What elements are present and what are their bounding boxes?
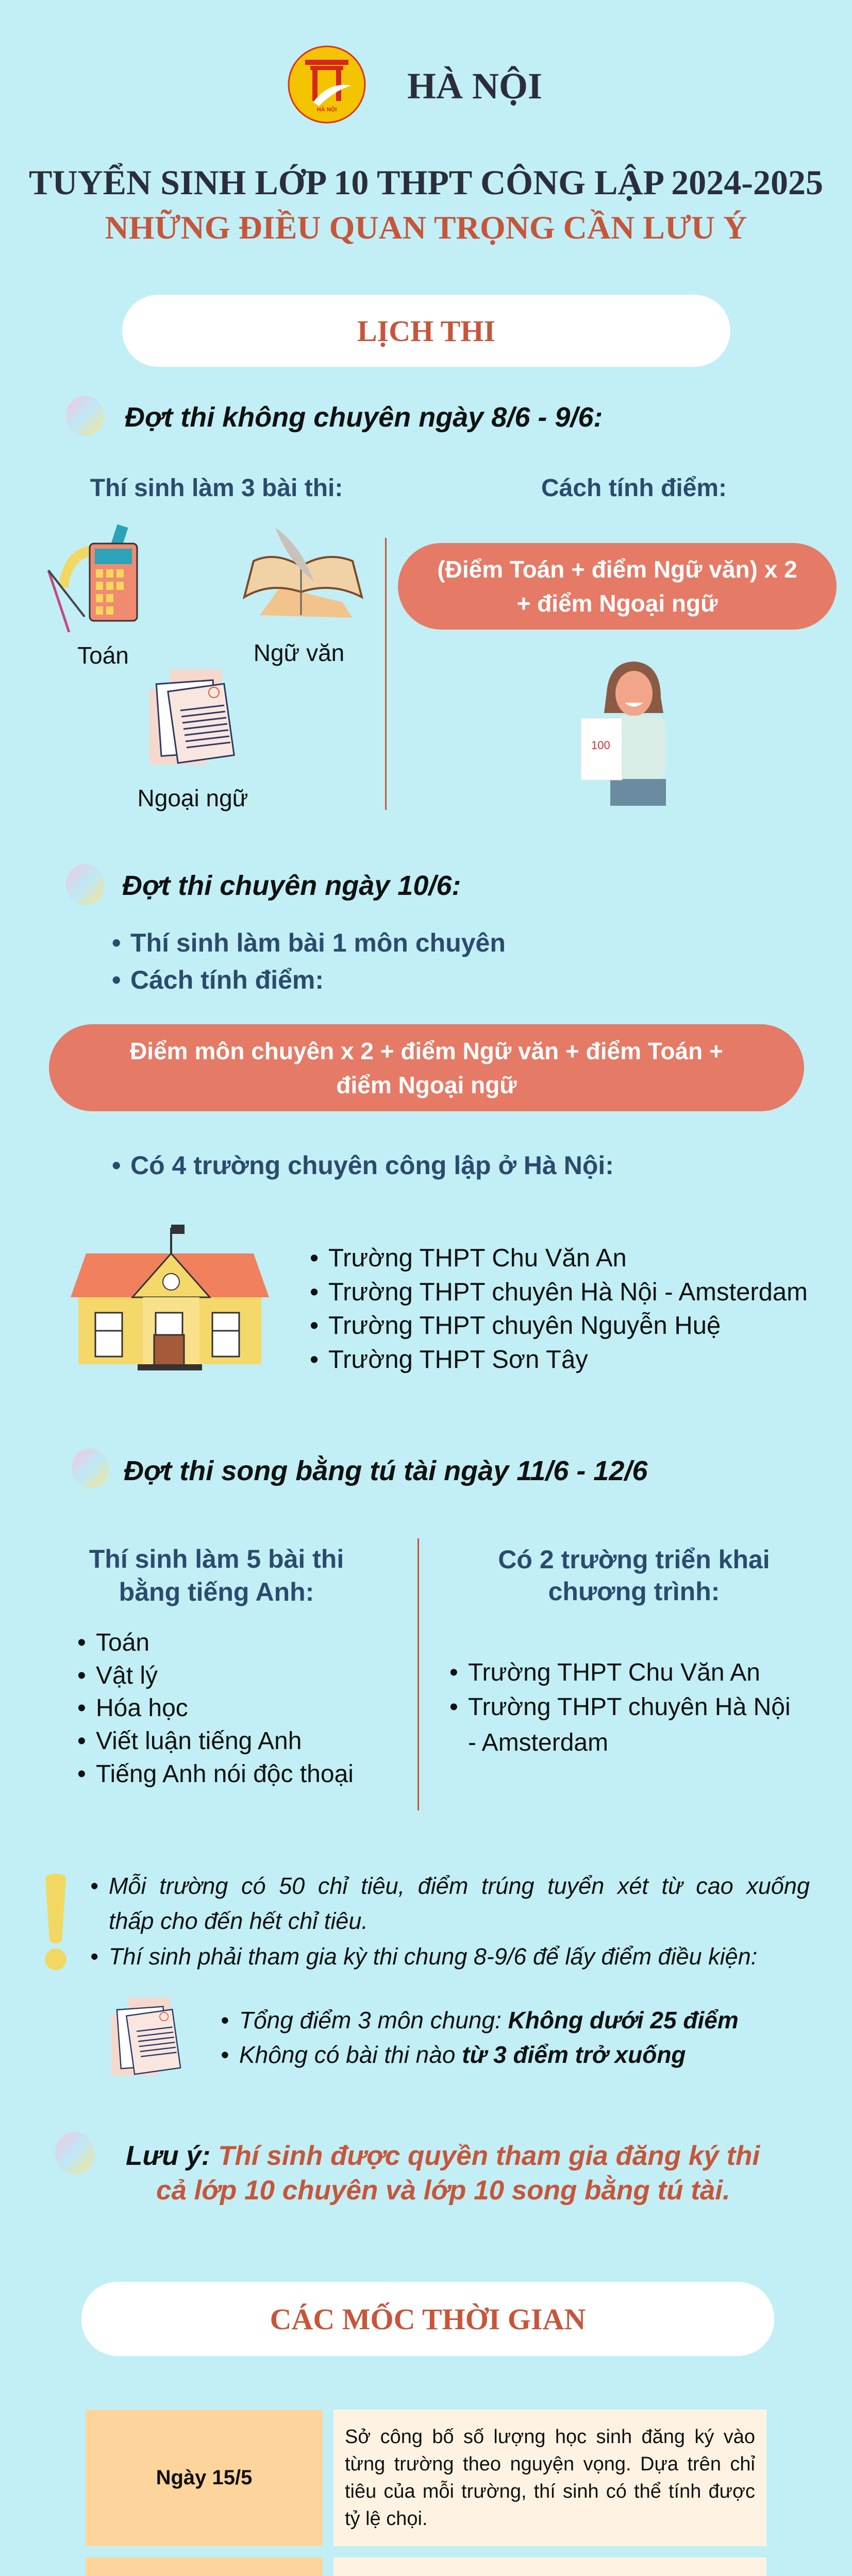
- heading: non-specialized exam: Đợt thi không chuyên ngày 8/6 - 9/6:: [125, 402, 603, 433]
- list: 5 subjects: [78, 1629, 354, 1788]
- formula pill: non-specialized: (Điểm Toán + điểm Ngữ văn) x 2: [437, 556, 797, 583]
- subheading: scoring: Cách tính điểm:: [541, 474, 727, 502]
- formula pill: non-specialized: [398, 543, 837, 630]
- list: 2 schools: Trường THPT chuyên Hà Nội: [468, 1693, 791, 1721]
- list: 5 subjects: Viết luận tiếng Anh: [96, 1727, 302, 1755]
- subheading: 2 schools: Có 2 trường triển khai: [498, 1545, 770, 1574]
- title: TUYỂN SINH LỚP 10 THPT CÔNG LẬP 2024-2025: [29, 163, 823, 202]
- icon: bubble 4: [55, 2132, 94, 2174]
- label: Ngoại ngữ: Ngoại ngữ: [138, 785, 248, 811]
- list: specialized schools: Trường THPT chuyên Nguyễn Huệ: [328, 1312, 721, 1340]
- list: 5 subjects: Vật lý: [96, 1662, 158, 1689]
- list: 5 subjects: Tiếng Anh nói độc thoại: [96, 1760, 354, 1788]
- section header: Lịch thi: LỊCH THI: [357, 314, 495, 347]
- heading: bilingual baccalaureate exam: Đợt thi song bằng tú tài ngày 11/6 - 12/6: [124, 1455, 647, 1486]
- icon: math tools: [47, 524, 138, 632]
- icon: girl holding paper: [580, 662, 666, 806]
- logo: [288, 45, 366, 124]
- conditions list: [222, 2007, 739, 2068]
- formula pill: specialized: [49, 1024, 804, 1111]
- row: 2/7: [86, 2557, 766, 2576]
- conditions list: Tổng điểm 3 môn chung: Không dưới 25 điểm: [239, 2007, 739, 2033]
- divider: [417, 1538, 419, 1810]
- notes: italic bullets: Mỗi trường có 50 chỉ tiêu, điểm trúng tuyển xét từ cao xuống: [109, 1873, 810, 1899]
- formula pill: specialized: Điểm môn chuyên x 2 + điểm Ngữ văn + điểm Toán +: [130, 1038, 723, 1064]
- section header: Lịch thi: [122, 295, 730, 367]
- list: 2 schools: - Amsterdam: [468, 1729, 608, 1756]
- note callout: Lưu ý: Thí sinh được quyền tham gia đăng ký thi: [126, 2141, 760, 2171]
- bullet: 4 specialized schools: Có 4 trường chuyên công lập ở Hà Nội:: [130, 1151, 614, 1180]
- list: 5 subjects: Toán: [96, 1629, 149, 1656]
- subheading: 2 schools: [498, 1545, 770, 1606]
- notes: italic bullets: [91, 1873, 810, 1970]
- list: 5 subjects: Hóa học: [96, 1694, 188, 1722]
- icon: bubble 3: [72, 1448, 109, 1488]
- icon: exclamation mark: [45, 1874, 66, 1970]
- icon: bubble 2: [66, 864, 104, 905]
- icon: papers: [149, 669, 235, 765]
- label: Ngữ văn: Ngữ văn: [254, 639, 344, 666]
- heading: specialized exam: Đợt thi chuyên ngày 10/6:: [122, 870, 461, 901]
- conditions list: Không có bài thi nào từ 3 điểm trở xuống: [239, 2041, 686, 2068]
- list: 2 schools: [450, 1659, 791, 1756]
- subheading: 3 exams: Thí sinh làm 3 bài thi:: [90, 474, 343, 502]
- formula pill: non-specialized: + điểm Ngoại ngữ: [517, 590, 717, 617]
- notes: italic bullets: thấp cho đến hết chỉ tiêu.: [109, 1908, 368, 1934]
- icon: book and quill: [242, 528, 363, 618]
- notes: italic bullets: Thí sinh phải tham gia kỳ thi chung 8-9/6 để lấy điểm điều kiện:: [109, 1943, 757, 1970]
- timeline table: [86, 2410, 766, 2576]
- bullets: specialized info: Cách tính điểm:: [130, 965, 324, 994]
- logo: HÀ NỘI: [317, 106, 337, 113]
- subheading: 5 exams in English: Thí sinh làm 5 bài thi: [89, 1545, 344, 1573]
- subheading: 5 exams in English: bằng tiếng Anh:: [119, 1578, 314, 1606]
- list: specialized schools: [310, 1244, 808, 1374]
- row: 15/5: [86, 2410, 766, 2546]
- label: Toán: Toán: [77, 642, 129, 669]
- row: 15/5: Ngày 15/5: [156, 2466, 252, 2489]
- icon: girl holding paper: 100: [591, 739, 610, 752]
- icon: school building: [71, 1225, 269, 1370]
- subheading: 5 exams in English: [89, 1545, 344, 1606]
- list: specialized schools: Trường THPT Chu Văn An: [328, 1244, 627, 1272]
- divider: [385, 538, 387, 810]
- row: 15/5: Sở công bố số lượng học sinh đăng ký vào từng trường theo nguyện vọng. Dựa trên chỉ tiêu của mỗi trường, thí sinh có thể tính được tỷ lệ chọi.: [345, 2426, 755, 2530]
- subheading: 2 schools: chương trình:: [548, 1577, 720, 1606]
- subtitle: NHỮNG ĐIỀU QUAN TRỌNG CẦN LƯU Ý: [105, 209, 747, 246]
- section header: timeline: [81, 2282, 774, 2356]
- icon: exam papers: [111, 1997, 181, 2076]
- formula pill: specialized: điểm Ngoại ngữ: [336, 1072, 517, 1098]
- bullets: specialized info: [112, 928, 506, 994]
- note callout: [126, 2141, 761, 2206]
- icon: bubble 1: [66, 396, 104, 436]
- note callout: cả lớp 10 chuyên và lớp 10 song bằng tú tài.: [156, 2175, 730, 2206]
- header: Hà Nội: HÀ NỘI: [407, 65, 542, 107]
- section header: timeline: CÁC MỐC THỜI GIAN: [270, 2302, 586, 2336]
- list: specialized schools: Trường THPT Sơn Tây: [328, 1346, 588, 1374]
- list: specialized schools: Trường THPT chuyên Hà Nội - Amsterdam: [328, 1278, 808, 1306]
- bullets: specialized info: Thí sinh làm bài 1 môn chuyên: [130, 928, 506, 957]
- list: 2 schools: Trường THPT Chu Văn An: [468, 1659, 760, 1686]
